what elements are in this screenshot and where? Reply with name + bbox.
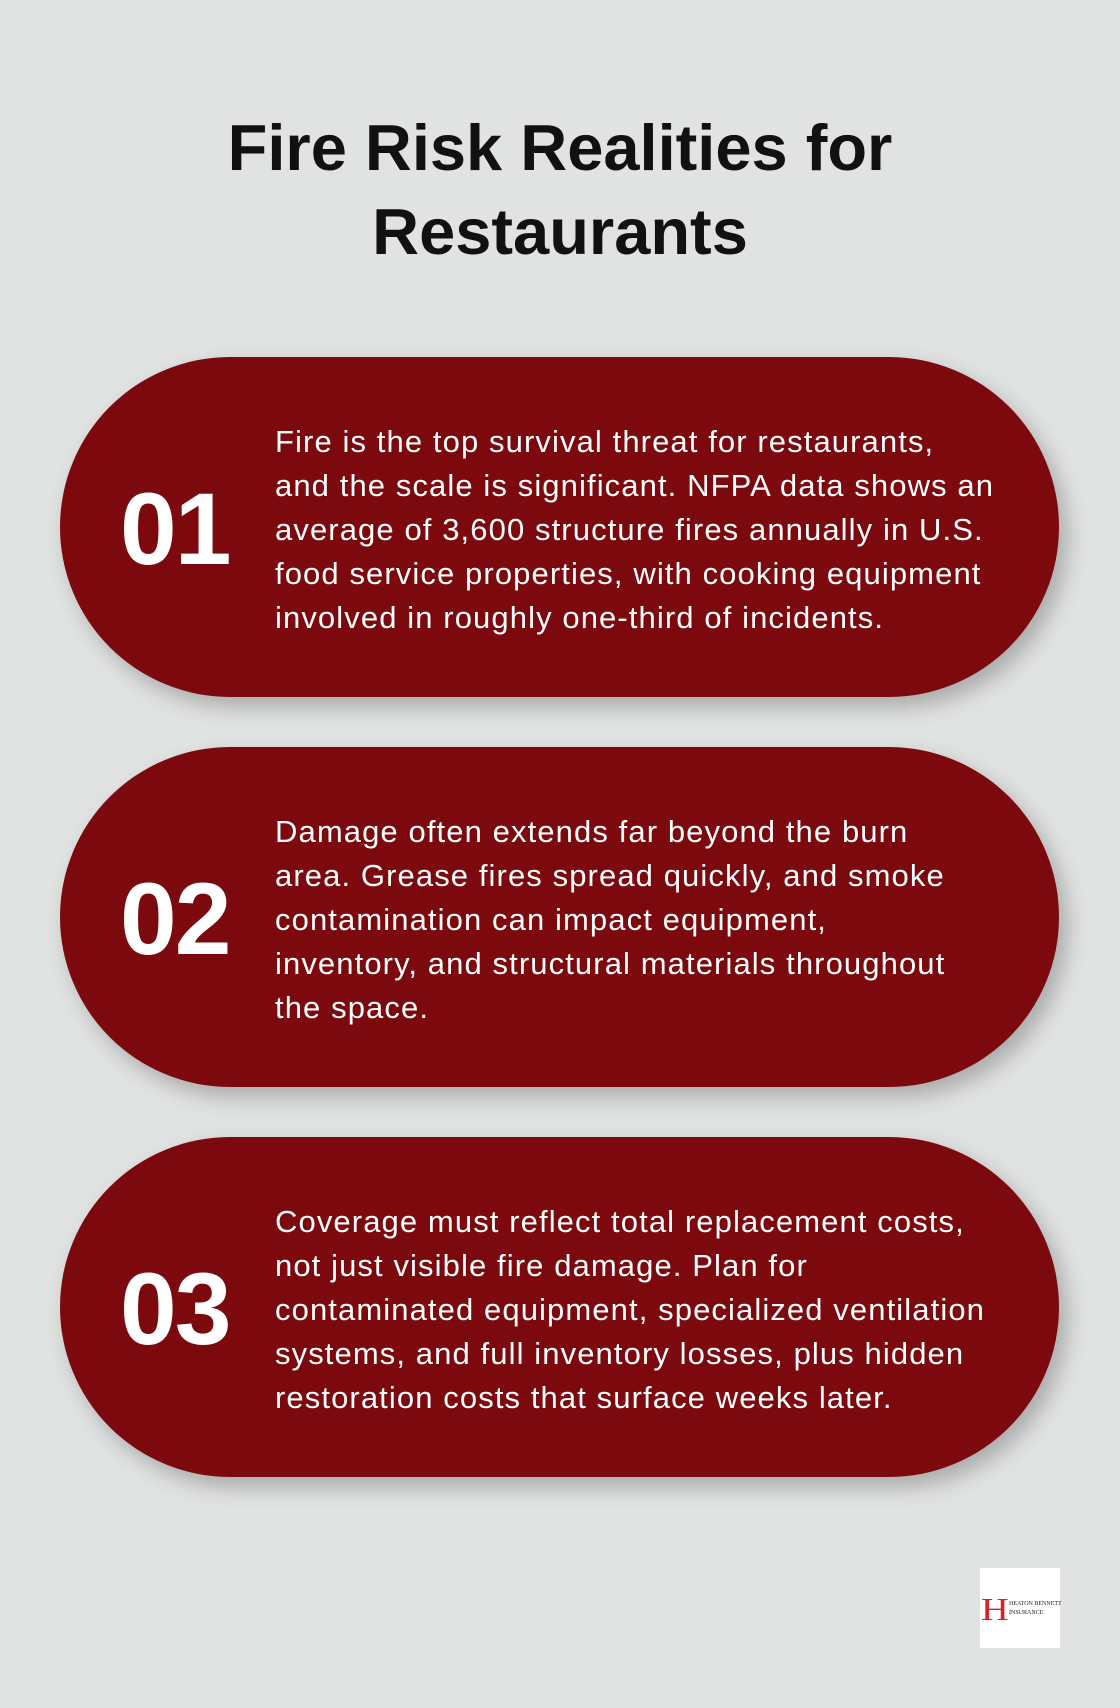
number 01: 01	[120, 472, 229, 586]
text block 01: average of 3,600 structure fires annually in U.S.	[275, 512, 984, 547]
text block 03: restoration costs that surface weeks later.	[275, 1380, 893, 1415]
text block 03: systems, and full inventory losses, plus hidden	[275, 1336, 964, 1371]
panel: 03	[60, 1137, 1059, 1477]
text block 01: food service properties, with cooking equipment	[275, 556, 982, 591]
logo	[980, 1568, 1060, 1648]
text block 01	[275, 424, 994, 635]
text block 02: Damage often extends far beyond the burn	[275, 814, 908, 849]
text block 01: involved in roughly one-third of incidents.	[275, 600, 884, 635]
text block 02: area. Grease fires spread quickly, and smoke	[275, 858, 945, 893]
text block 02: the space.	[275, 990, 429, 1025]
logo: HEATON BENNETT	[1009, 1601, 1062, 1607]
logo: H	[981, 1591, 1009, 1627]
title	[228, 111, 892, 268]
text block 02: contamination can impact equipment,	[275, 902, 827, 937]
text block 02	[275, 814, 945, 1025]
text block 01: Fire is the top survival threat for restaurants,	[275, 424, 934, 459]
panel: 01	[60, 357, 1059, 697]
logo: INSURANCE	[1009, 1610, 1043, 1616]
text block 03	[275, 1204, 985, 1415]
text block 03: contaminated equipment, specialized ventilation	[275, 1292, 985, 1327]
number 02: 02	[120, 862, 229, 976]
text block 03: Coverage must reflect total replacement costs,	[275, 1204, 965, 1239]
text block 03: not just visible fire damage. Plan for	[275, 1248, 808, 1283]
text block 02: inventory, and structural materials throughout	[275, 946, 945, 981]
text block 01: and the scale is significant. NFPA data shows an	[275, 468, 994, 503]
panel: 02	[60, 747, 1059, 1087]
number 03: 03	[120, 1252, 229, 1366]
title: Restaurants	[372, 195, 748, 268]
title: Fire Risk Realities for	[228, 111, 892, 184]
